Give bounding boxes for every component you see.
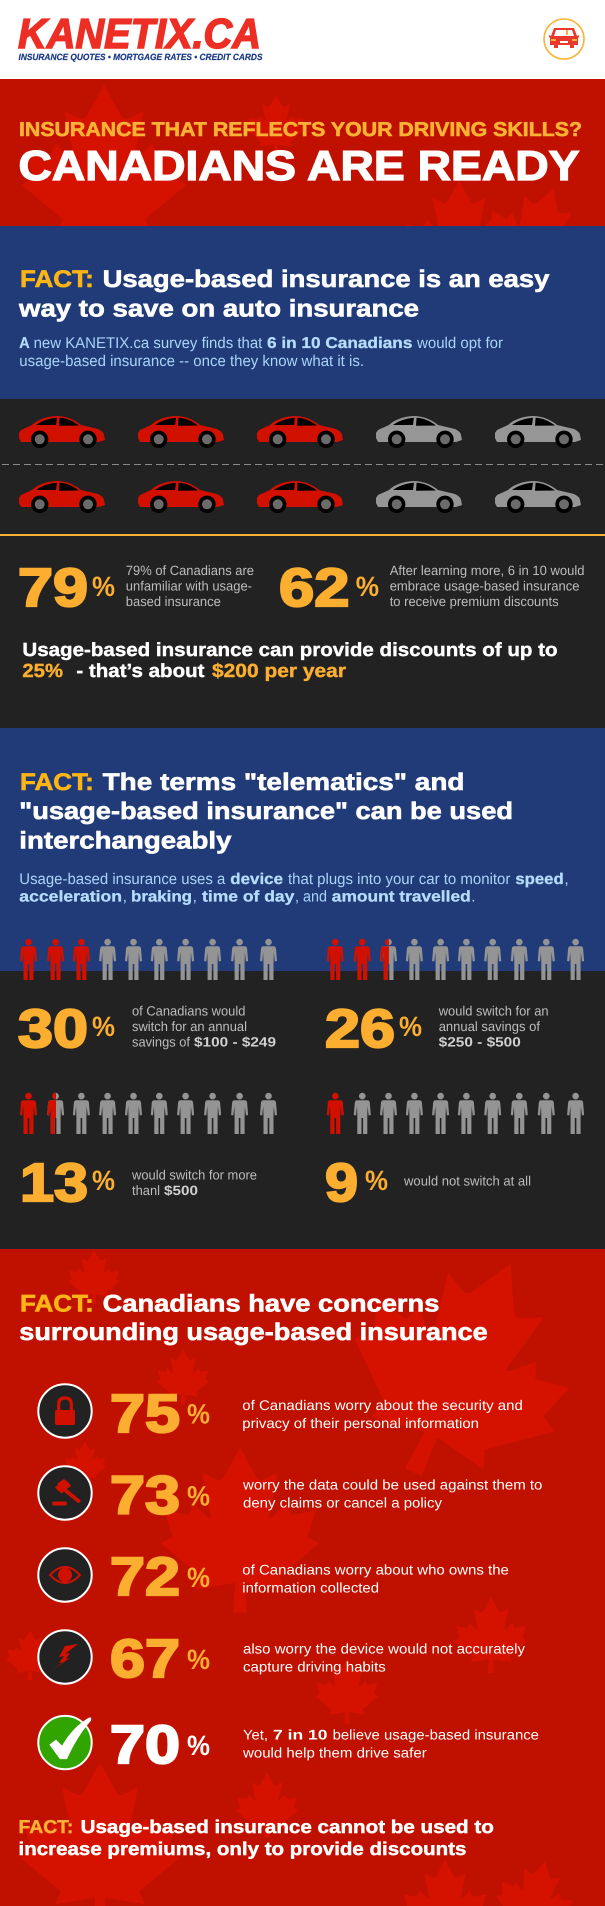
row: who owns the information [38, 1547, 509, 1607]
icon: lightning bolt [38, 1630, 92, 1684]
stat: 30%: 30 [18, 999, 88, 1059]
title kicker: INSURANCE THAT REFLECTS YOUR DRIVING SKILLS? [19, 119, 582, 141]
icon: check mark [38, 1716, 92, 1769]
heading: fact 1: Usage-based insurance is an easy [103, 266, 550, 293]
chart: people 13% [20, 1093, 277, 1134]
stat: 13% [20, 1153, 257, 1213]
text: device description: , and [295, 889, 327, 906]
row: who owns the information: of Canadians worry about who owns the [242, 1561, 509, 1577]
stat: 13%: thanl [132, 1183, 160, 1198]
text: device description: acceleration [19, 889, 122, 906]
stat: 62% [279, 558, 584, 618]
stat: 30% [18, 999, 276, 1059]
stat: 26% [325, 999, 549, 1059]
row: drive safer: would help them drive safer [242, 1744, 427, 1760]
logo: KANETIX.CA [18, 10, 261, 57]
chart: cars row 1 [19, 416, 581, 448]
row: drive safer: % [187, 1730, 210, 1761]
text: device description: . [471, 889, 476, 906]
text: discounts callout: $200 per year [212, 661, 347, 682]
text: final fact: increase premiums, only to provide discounts [18, 1838, 466, 1859]
text: device description: , [193, 889, 197, 906]
chart: cars row 2 [19, 481, 581, 513]
stat: 30%: $100 - $249 [194, 1035, 276, 1050]
heading: fact 3: Canadians have concerns [103, 1290, 439, 1318]
stat: 30%: savings of [132, 1035, 190, 1050]
icon: car badge [544, 19, 584, 59]
text: device description [19, 871, 569, 906]
text: discounts callout [22, 640, 557, 682]
row: device accuracy [38, 1629, 525, 1689]
row: who owns the information: information collected [242, 1579, 379, 1595]
row: device accuracy: 67 [110, 1629, 180, 1689]
stat: 26%: would switch for an [438, 1004, 549, 1018]
text: device description: amount travelled [332, 889, 471, 906]
row: drive safer [38, 1715, 539, 1775]
panel: concerns [0, 1217, 605, 1906]
stat: 62%: % [356, 571, 379, 602]
icon: eye [38, 1548, 92, 1602]
stat: 79%: 79% of Canadians are [126, 563, 254, 578]
chart: people 26% [327, 939, 584, 980]
heading: fact 1: FACT: [20, 266, 94, 293]
heading: fact 2 [19, 769, 513, 854]
heading: fact 2: "usage-based insurance" can be used [19, 798, 513, 825]
heading: fact 1: way to save on auto insurance [18, 296, 419, 323]
stat: 30%: switch for an annual [132, 1019, 247, 1034]
row: data used against them: worry the data could be used against them to [242, 1476, 543, 1492]
panel: fact 1 [0, 226, 605, 399]
stat: 13%: $500 [164, 1183, 198, 1198]
row: drive safer: 7 in 10 [273, 1726, 328, 1742]
text: survey intro: new KANETIX.ca survey finds that [34, 335, 263, 352]
row: data used against them: deny claims or cancel a policy [243, 1494, 442, 1510]
row: data used against them: 73 [110, 1466, 180, 1526]
panel: title banner [0, 79, 605, 226]
text: discounts callout: 25% [22, 661, 63, 682]
heading: fact 1 [18, 266, 550, 323]
stat: 9%: would not switch at all [403, 1173, 531, 1188]
stat: 79%: % [92, 571, 115, 602]
text: device description: braking [131, 889, 192, 906]
heading: fact 2: interchangeably [19, 827, 232, 854]
row: device accuracy: also worry the device would not accurately [243, 1640, 525, 1656]
text: device description: Usage-based insurance uses a [19, 871, 226, 888]
row: device accuracy: % [187, 1644, 210, 1675]
text: final fact [18, 1816, 494, 1859]
heading: fact 3 [19, 1290, 488, 1346]
icon: padlock [38, 1384, 92, 1438]
stat: 79%: based insurance [126, 594, 221, 609]
chart: people 9% [327, 1093, 584, 1134]
row: security and privacy: % [187, 1399, 210, 1430]
row: who owns the information: % [187, 1562, 210, 1593]
icon: gavel [38, 1466, 92, 1520]
stat: 30%: % [92, 1011, 115, 1042]
stat: 79% [18, 558, 254, 618]
text: survey intro: 6 in 10 Canadians [267, 335, 412, 352]
stat: 79%: unfamiliar with usage- [126, 579, 252, 594]
row: drive safer: 70 [110, 1715, 180, 1775]
stat: 62%: After learning more, 6 in 10 would [390, 563, 584, 578]
text: device description: time of day [202, 889, 295, 906]
panel: savings stats [0, 939, 605, 1249]
row: security and privacy: privacy of their personal information [242, 1415, 479, 1431]
row: device accuracy: capture driving habits [243, 1658, 386, 1674]
row: who owns the information: 72 [110, 1547, 180, 1607]
heading: fact 3: FACT: [20, 1290, 94, 1318]
text: device description: speed [515, 871, 564, 888]
stat: 79%: 79 [18, 558, 88, 618]
stat: 26%: % [399, 1011, 422, 1042]
text: device description: device [230, 871, 283, 888]
stat: 30%: of Canadians would [132, 1004, 245, 1018]
row: security and privacy: of Canadians worry about the security and [242, 1397, 523, 1413]
text: device description: , [123, 889, 127, 906]
stat: 62%: 62 [279, 558, 350, 618]
panel: cars and stats [0, 399, 605, 728]
text: device description: , [564, 871, 569, 888]
stat: 13%: 13 [20, 1153, 88, 1213]
stat: 9%: 9 [325, 1153, 358, 1213]
text: final fact: Usage-based insurance cannot be used to [81, 1816, 494, 1837]
stat: 26%: $250 - $500 [439, 1035, 521, 1050]
stat: 13%: % [92, 1165, 115, 1196]
text: survey intro [19, 335, 503, 370]
logo: INSURANCE QUOTES • MORTGAGE RATES • CREDIT CARDS [18, 52, 262, 62]
text: final fact: FACT: [18, 1816, 73, 1837]
text: survey intro: would opt for [416, 335, 503, 352]
text: discounts callout: - that’s about [76, 661, 205, 682]
stat: 62%: to receive premium discounts [390, 594, 559, 609]
stat: 62%: embrace usage-based insurance [390, 579, 580, 594]
text: device description: that plugs into your car to monitor [288, 871, 510, 888]
row: security and privacy [38, 1384, 523, 1444]
title: CANADIANS ARE READY [18, 142, 580, 189]
heading: fact 2: The terms "telematics" and [103, 769, 464, 796]
text: discounts callout: Usage-based insurance can provide discounts of up to [22, 640, 557, 661]
stat: 26%: annual savings of [439, 1019, 540, 1034]
row: security and privacy: 75 [110, 1384, 180, 1444]
stat: 13%: would switch for more [131, 1167, 257, 1182]
row: data used against them [38, 1466, 543, 1526]
heading: fact 2: FACT: [20, 769, 94, 796]
heading: fact 3: surrounding usage-based insurance [19, 1319, 488, 1346]
text: survey intro: A [19, 335, 30, 352]
text: survey intro: usage-based insurance -- once they know what it is. [19, 353, 364, 370]
stat: 26%: 26 [325, 999, 395, 1059]
row: data used against them: % [187, 1480, 210, 1512]
panel: fact 2 [0, 728, 605, 971]
stat: 9%: % [365, 1165, 388, 1196]
panel: header [0, 0, 605, 79]
stat: 9% [325, 1153, 531, 1213]
chart: people 30% [20, 939, 277, 980]
row: drive safer: believe usage-based insurance [333, 1726, 539, 1742]
row: drive safer: Yet, [243, 1726, 268, 1742]
